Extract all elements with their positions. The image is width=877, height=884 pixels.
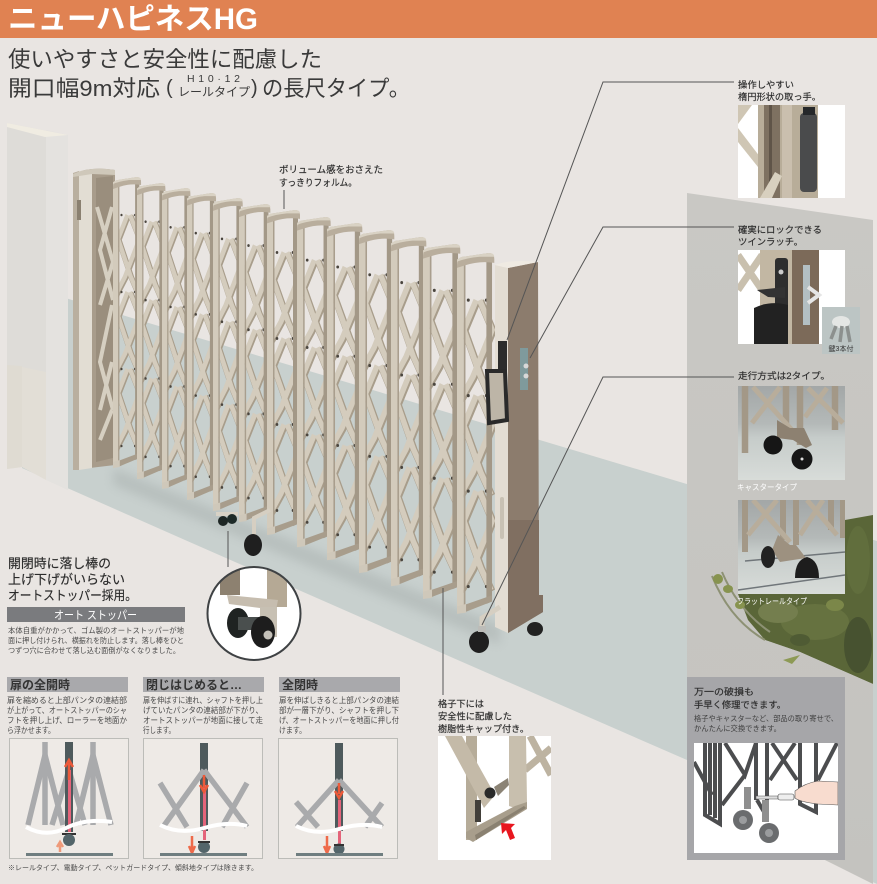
step 2 text: オートストッパーが地面に接して走 [143, 715, 263, 725]
panel text [694, 714, 838, 733]
auto stopper description [8, 626, 185, 655]
headline: H10·12 [187, 73, 240, 85]
step 3 text [279, 695, 399, 735]
fixed gate post [73, 169, 115, 470]
illustration: replacing a caster [694, 743, 838, 853]
caption: caster type: キャスタータイプ [737, 483, 797, 492]
panel text: 格子やキャスターなど、部品の取り寄せで、 [694, 714, 838, 723]
label: running types: 走行方式は2タイプ。 [738, 370, 830, 381]
panel heading [694, 686, 786, 710]
panel heading: 万一の破損も [694, 686, 754, 697]
heading: auto stopper [8, 556, 137, 603]
step 1 text: フトを押し上げ、ローラーを地面か [7, 715, 127, 725]
photo: three keys: 鍵3本付 [829, 344, 853, 353]
step 1 text: 扉を縮めると上部パンタの連結部 [7, 695, 127, 705]
auto stopper description: 面に押し付けられ、横振れを防止します。落し棒をひと [8, 636, 184, 645]
sliding end post [495, 261, 543, 633]
auto stopper casters [216, 510, 270, 556]
plant foliage [712, 515, 873, 684]
step 1 text: ら浮かせます。 [7, 725, 55, 735]
label: twin latch: 確実にロックできる [738, 224, 822, 235]
step 2 diagram [144, 738, 262, 858]
panel: repair [687, 677, 845, 860]
step 1 heading: 扉の全開時 [10, 677, 70, 692]
label: resin cap [438, 698, 529, 734]
gate handle and latch [487, 341, 528, 423]
left masonry pillar [7, 123, 68, 490]
step 1 diagram [10, 738, 128, 858]
step 2 text: げていたパンタの連結部が下がり、 [143, 705, 263, 715]
step 3 text: けます。 [279, 726, 306, 735]
caption: flat rail type: フラットレールタイプ [737, 597, 807, 606]
step 3 text: 部が一層下がり、シャフトを押し下 [279, 705, 399, 715]
auto stopper description: 本体自重がかかって、ゴム製のオートストッパーが地 [8, 626, 185, 635]
header band [0, 0, 877, 38]
label: handle [738, 79, 821, 102]
headline: 使いやすさと安全性に配慮した [8, 47, 322, 72]
label: resin cap: 樹脂性キャップ付き。 [438, 723, 529, 734]
panel heading: 手早く修理できます。 [694, 699, 786, 710]
gate shadow on ground [113, 468, 500, 645]
auto stopper description: つずつ穴に合わせて落し込む面倒がなくなりました。 [8, 646, 180, 655]
step 1 heading [7, 677, 128, 692]
auto stopper bar [7, 607, 185, 622]
step 3 heading [279, 677, 400, 692]
label: slim form [279, 164, 383, 188]
lattice frames [113, 177, 141, 468]
title: ニューハピネスHG [8, 3, 258, 36]
label: handle: 操作しやすい [738, 79, 794, 90]
callout: stopper detail circle [207, 565, 301, 660]
folding gate [73, 169, 543, 653]
step 3 text: げ、オートストッパーを地面に押し付 [279, 715, 399, 725]
step 2 text: 扉を伸ばすに連れ、シャフトを押し上 [143, 695, 263, 705]
step 3 diagram [278, 738, 398, 858]
headline: ( [166, 77, 173, 99]
step 2 text [143, 695, 263, 735]
headline: レールタイプ [178, 85, 250, 99]
step 1 text: が上がって、オートストッパーのシャ [7, 705, 127, 715]
headline: ) [251, 77, 258, 99]
label: twin latch: ツインラッチ。 [738, 237, 803, 247]
step 2 text: 行します。 [143, 725, 175, 735]
footnote: ※レールタイプ、電動タイプ、ペットガードタイプ、傾斜地タイプは除きます。 [8, 863, 258, 872]
label: slim form: すっきりフォルム。 [279, 177, 357, 188]
label: resin cap: 安全性に配慮した [438, 710, 512, 722]
heading: auto stopper: 上げ下げがいらない [8, 572, 125, 587]
label: slim form: ボリューム感をおさえた [279, 164, 383, 175]
leader lines [228, 82, 734, 695]
front and rear casters [469, 607, 543, 653]
headline: の長尺タイプ。 [262, 76, 410, 101]
auto stopper bar: オート ストッパー [54, 609, 137, 622]
label: twin latch [738, 224, 822, 247]
photo: resin cap [438, 736, 551, 860]
step 2 heading: 閉じはじめると… [146, 678, 242, 692]
ground pavement [22, 285, 877, 884]
photo: oval handle [738, 105, 845, 198]
headline: 開口幅9m対応 [8, 76, 160, 101]
photo: caster type [738, 386, 845, 480]
photo: flat rail type [738, 500, 845, 594]
heading: auto stopper: オートストッパー採用。 [8, 588, 137, 603]
heading: auto stopper: 開閉時に落し棒の [8, 556, 111, 571]
step 3 text: 扉を伸ばしきると上部パンタの連結 [279, 695, 399, 705]
headline [8, 47, 410, 101]
right garden wall [687, 193, 873, 884]
panel text: かんたんに交換できます。 [694, 724, 781, 733]
photo: three keys [822, 307, 860, 354]
label: handle: 楕円形状の取っ手。 [738, 91, 821, 102]
step 1 text [7, 695, 127, 735]
photo: twin latch [738, 250, 845, 344]
step 3 heading: 全閉時 [282, 677, 318, 692]
label: resin cap: 格子下には [438, 698, 484, 709]
